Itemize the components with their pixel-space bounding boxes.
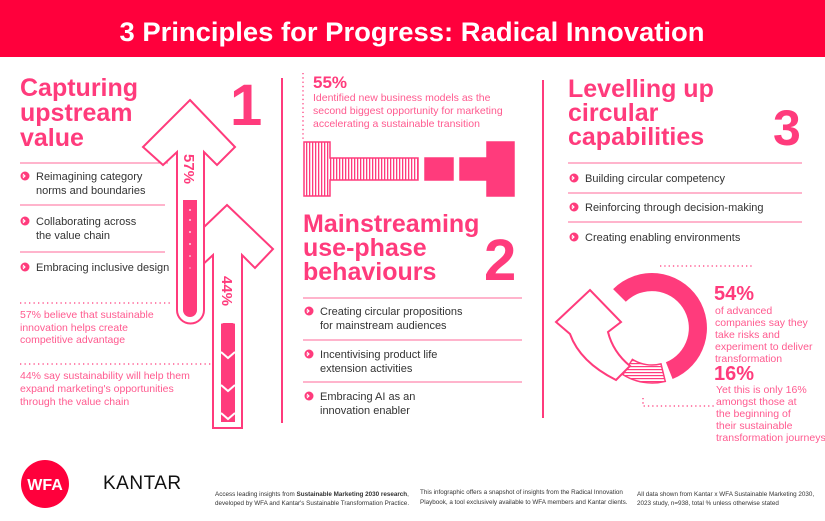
bullet list 1: norms and boundaries: [36, 185, 146, 197]
arrow 57%: [143, 100, 235, 324]
stat 16%: Yet this is only 16%: [716, 384, 807, 396]
heading 2: behaviours: [303, 258, 436, 286]
stat 57% text: innovation helps create: [20, 322, 128, 334]
footer text 3: All data shown from Kantar x WFA Sustainable Marketing 2030,: [637, 491, 814, 498]
stat 55%: second biggest opportunity for marketing: [313, 105, 503, 117]
header bar: [0, 0, 825, 57]
stat 44% text: 44% say sustainability will help them: [20, 370, 190, 382]
footer text 1: Access leading insights from Sustainable Marketing 2030 research,: [215, 491, 409, 498]
footer text 1: [215, 491, 409, 507]
bullet list 2: extension activities: [320, 363, 413, 375]
stat 54%: of advanced: [715, 305, 772, 317]
stat 55%: accelerating a sustainable transition: [313, 118, 480, 130]
stat 54%: take risks and: [715, 329, 780, 341]
panel: principle 2: [303, 73, 522, 417]
heading 2: use-phase: [303, 234, 427, 262]
bullet list 3: Building circular competency: [585, 173, 726, 185]
bullet list 2: for mainstream audiences: [320, 320, 447, 332]
stat 57% text: competitive advantage: [20, 334, 125, 346]
stat 55%: Identified new business models as the: [313, 92, 491, 104]
heading 3: Levelling up: [568, 75, 714, 103]
stat 57% text: 57% believe that sustainable: [20, 309, 154, 321]
stat 16%: transformation journeys: [716, 432, 825, 444]
stat 16%: amongst those at: [716, 396, 797, 408]
stat 54%: transformation: [715, 353, 782, 365]
stat 44% text: through the value chain: [20, 396, 129, 408]
arrow 44%: 44%: [218, 276, 235, 306]
stat 16%: the beginning of: [716, 408, 791, 420]
stat 54%: [714, 283, 813, 365]
arrow 44%: [181, 205, 273, 428]
heading 3: capabilities: [568, 123, 704, 151]
heading 1: value: [20, 124, 84, 152]
bullet list 3: [568, 163, 802, 244]
bullet list 1: Reimagining category: [36, 171, 143, 183]
bullet list 1: [20, 163, 169, 274]
stat 57% text: [20, 303, 172, 346]
heading 1: Capturing: [20, 74, 138, 102]
footer text 3: 2023 study, n=938, total % unless otherwise stated: [637, 500, 779, 507]
heading 1: [20, 74, 138, 152]
stat 16%: [714, 363, 825, 444]
footer text 3: [637, 491, 814, 507]
bullet list 2: [303, 298, 522, 417]
bullet list 1: Collaborating across: [36, 216, 137, 228]
logo: WFA: WFA: [27, 477, 63, 494]
bullet list 3: Reinforcing through decision-making: [585, 202, 764, 214]
footer text 1: developed by WFA and Kantar's Sustainable Transformation Practice.: [215, 500, 409, 507]
footer text 2: This infographic offers a snapshot of insights from the Radical Innovation: [420, 489, 623, 496]
stat 55%: 55%: [313, 73, 347, 92]
footer text 2: Playbook, a tool exclusively available to WFA members and Kantar clients.: [420, 499, 628, 506]
donut chart: [556, 266, 752, 406]
footer text 2: [420, 489, 628, 506]
heading 1: upstream: [20, 99, 133, 127]
bullet list 3: Creating enabling environments: [585, 232, 741, 244]
stat 44% text: [20, 364, 212, 408]
stat 16%: their sustainable: [716, 420, 793, 432]
heading 3: circular: [568, 99, 659, 127]
footer: [21, 460, 814, 508]
stat 54%: companies say they: [715, 317, 809, 329]
stat 54%: experiment to deliver: [715, 341, 813, 353]
bullet list 2: Incentivising product life: [320, 349, 437, 361]
stat 44% text: expand marketing's opportunities: [20, 383, 174, 395]
number 3: 3: [773, 100, 801, 156]
number 1: 1: [230, 73, 262, 138]
bullet list 2: Creating circular propositions: [320, 306, 463, 318]
bullet list 2: Embracing AI as an: [320, 391, 415, 403]
heading 3: [568, 75, 714, 151]
bullet list 1: Embracing inclusive design: [36, 262, 169, 274]
logo: KANTAR: KANTAR: [103, 473, 182, 494]
title: 3 Principles for Progress: Radical Innovation: [120, 17, 705, 47]
bullet list 2: innovation enabler: [320, 405, 410, 417]
stat 54%: 54%: [714, 283, 754, 305]
heading 2: Mainstreaming: [303, 210, 479, 238]
icon: bolt graphic: [304, 142, 514, 196]
number 2: 2: [484, 228, 516, 293]
bullet list 1: the value chain: [36, 230, 110, 242]
logo: WFA: [21, 460, 69, 508]
stat 16%: 16%: [714, 363, 754, 385]
heading 2: [303, 210, 479, 286]
panel: principle 1: [20, 73, 273, 428]
arrow 57%: 57%: [180, 154, 197, 184]
panel: principle 3: [556, 75, 825, 444]
stat 55%: [303, 73, 503, 140]
